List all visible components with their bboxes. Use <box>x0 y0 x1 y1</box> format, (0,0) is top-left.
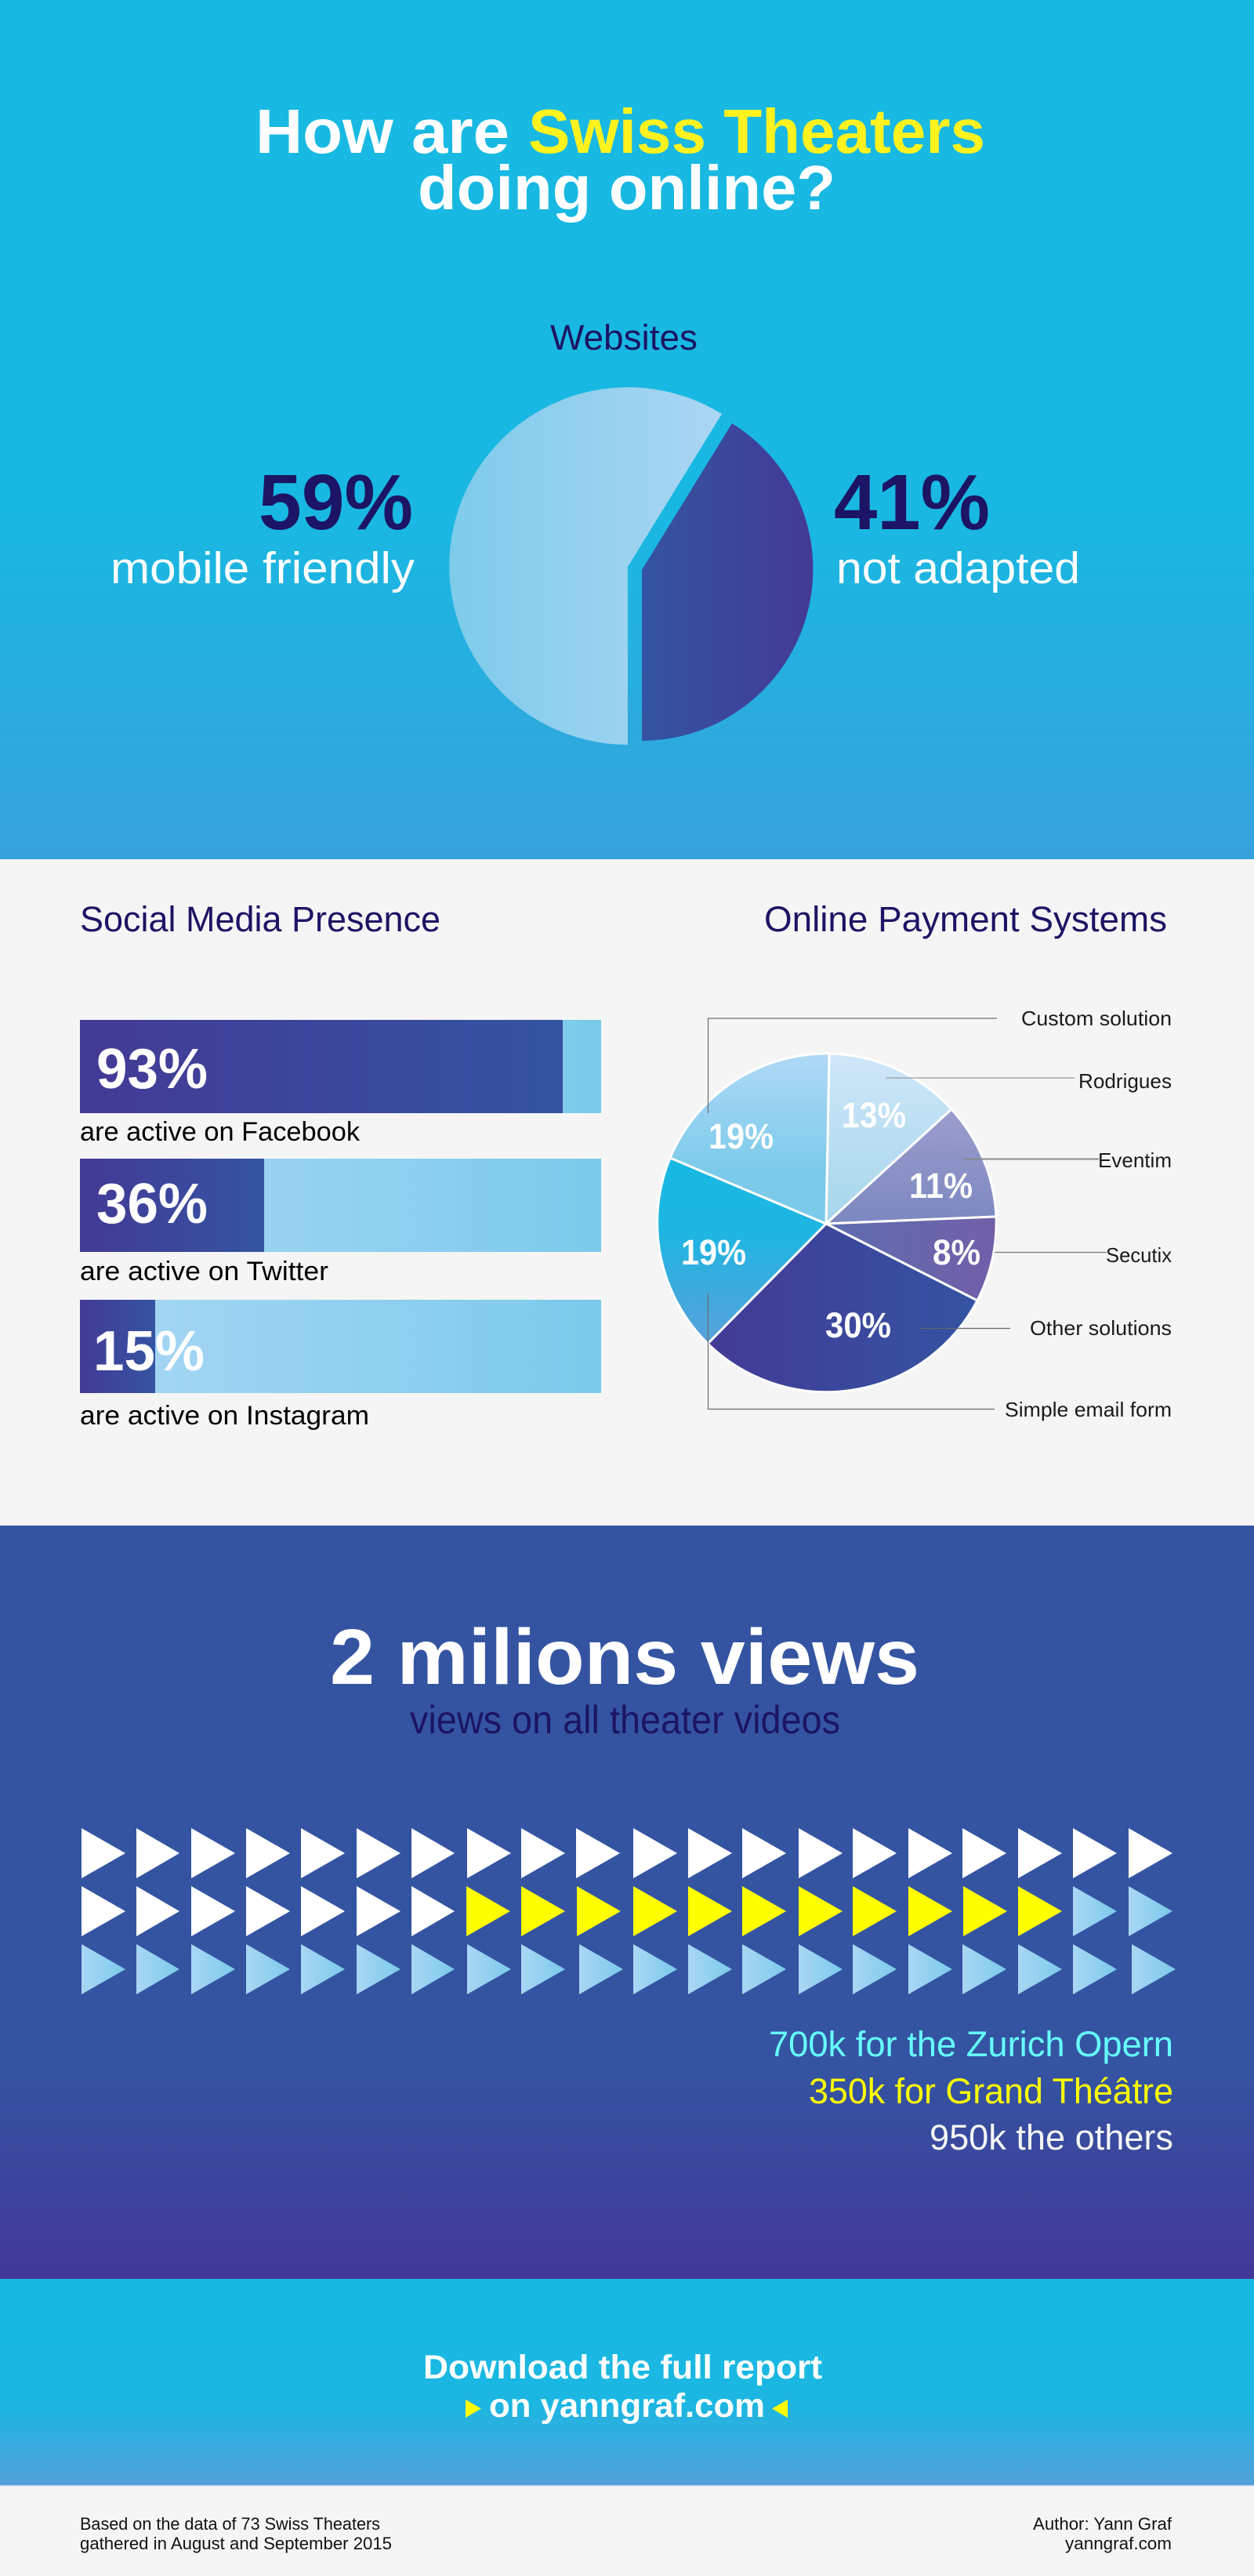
play triangles row 1 <box>82 1828 1172 1878</box>
slice: other solutions 19% <box>658 1158 826 1344</box>
title: doing online? <box>418 153 835 223</box>
heading: social media presence: Social Media Presence <box>80 899 440 939</box>
source note: gathered in August and September 2015 <box>80 2534 392 2553</box>
slice labels: 8% <box>933 1232 980 1272</box>
author credit: Author: Yann Graf <box>1033 2514 1172 2534</box>
cta text <box>423 2349 822 2425</box>
legend labels: Rodrigues <box>1078 1069 1172 1093</box>
bar: twitter <box>80 1159 601 1286</box>
panel: footer <box>0 2487 1254 2576</box>
stat: 41% not adapted <box>834 459 1080 593</box>
leader lines <box>709 1018 1107 1410</box>
stat: 41% not adapted: not adapted <box>836 543 1080 593</box>
source note: Based on the data of 73 Swiss Theaters <box>80 2514 380 2534</box>
legend labels: Secutix <box>1106 1243 1172 1267</box>
slice labels: 19% <box>709 1116 774 1156</box>
bar: facebook <box>80 1020 601 1147</box>
bar: twitter: 36% <box>96 1173 208 1235</box>
bar: instagram: 15% <box>93 1320 205 1383</box>
stat: 59% mobile friendly: mobile friendly <box>111 543 415 593</box>
slice: rodrigues 13% <box>826 1054 951 1224</box>
slice labels: 11% <box>909 1166 973 1206</box>
legend labels: Eventim <box>1098 1148 1172 1172</box>
cta text: Download the full report <box>423 2349 822 2386</box>
slice: mobile friendly <box>449 387 722 745</box>
bar: facebook: 93% <box>96 1038 208 1101</box>
slice labels: 30% <box>825 1305 891 1345</box>
slice labels: 19% <box>681 1232 746 1272</box>
stat: 41% not adapted: 41% <box>834 459 990 546</box>
icon: right yellow triangle <box>772 2400 788 2418</box>
pie chart: payment systems <box>658 1054 996 1392</box>
panel: download call to action <box>0 2279 1254 2487</box>
panel: social media and payment <box>0 859 1254 1526</box>
slice labels: 13% <box>842 1095 906 1135</box>
icon: left yellow triangle <box>466 2400 481 2418</box>
panel: hero <box>0 0 1254 859</box>
headline: 2 milions views: 2 milions views <box>330 1613 919 1701</box>
slice: simple email form 30% <box>708 1224 977 1392</box>
author credit: yanngraf.com <box>1065 2534 1172 2553</box>
bar: facebook: are active on Facebook <box>80 1117 361 1147</box>
play triangles row 2 <box>82 1886 1172 1936</box>
author credit <box>1033 2514 1172 2553</box>
legend labels: Custom solution <box>1021 1007 1172 1030</box>
slice: not adapted <box>642 423 813 741</box>
play triangles row 3 <box>82 1944 1176 1994</box>
legend labels <box>1005 1007 1172 1421</box>
heading: websites: Websites <box>550 317 698 357</box>
pie chart: websites <box>449 387 813 745</box>
breakdown text: 950k the others <box>930 2117 1173 2157</box>
title <box>256 96 985 223</box>
slice: secutix 8% <box>826 1217 996 1301</box>
stat: 59% mobile friendly: 59% <box>259 459 413 546</box>
panel: video views <box>0 1526 1254 2279</box>
breakdown text: 350k for Grand Théâtre <box>809 2071 1173 2111</box>
title: Swiss Theaters <box>528 96 985 166</box>
heading: online payment systems: Online Payment Systems <box>764 899 1167 939</box>
slice: eventim 11% <box>826 1109 996 1224</box>
slice labels <box>681 1095 980 1345</box>
legend labels: Simple email form <box>1005 1398 1172 1421</box>
breakdown text <box>769 2024 1173 2157</box>
bar: twitter: are active on Twitter <box>80 1257 328 1286</box>
bar: instagram: are active on Instagram <box>80 1401 369 1431</box>
slice: custom solution 19% <box>670 1054 829 1224</box>
subheading: views on all theater videos <box>410 1698 840 1742</box>
source note <box>80 2514 392 2553</box>
cta text: on yanngraf.com <box>489 2387 765 2425</box>
title: How are <box>256 96 509 166</box>
bar: instagram <box>80 1300 601 1431</box>
breakdown text: 700k for the Zurich Opern <box>769 2024 1173 2064</box>
stat: 59% mobile friendly <box>111 459 415 593</box>
legend labels: Other solutions <box>1030 1316 1172 1340</box>
